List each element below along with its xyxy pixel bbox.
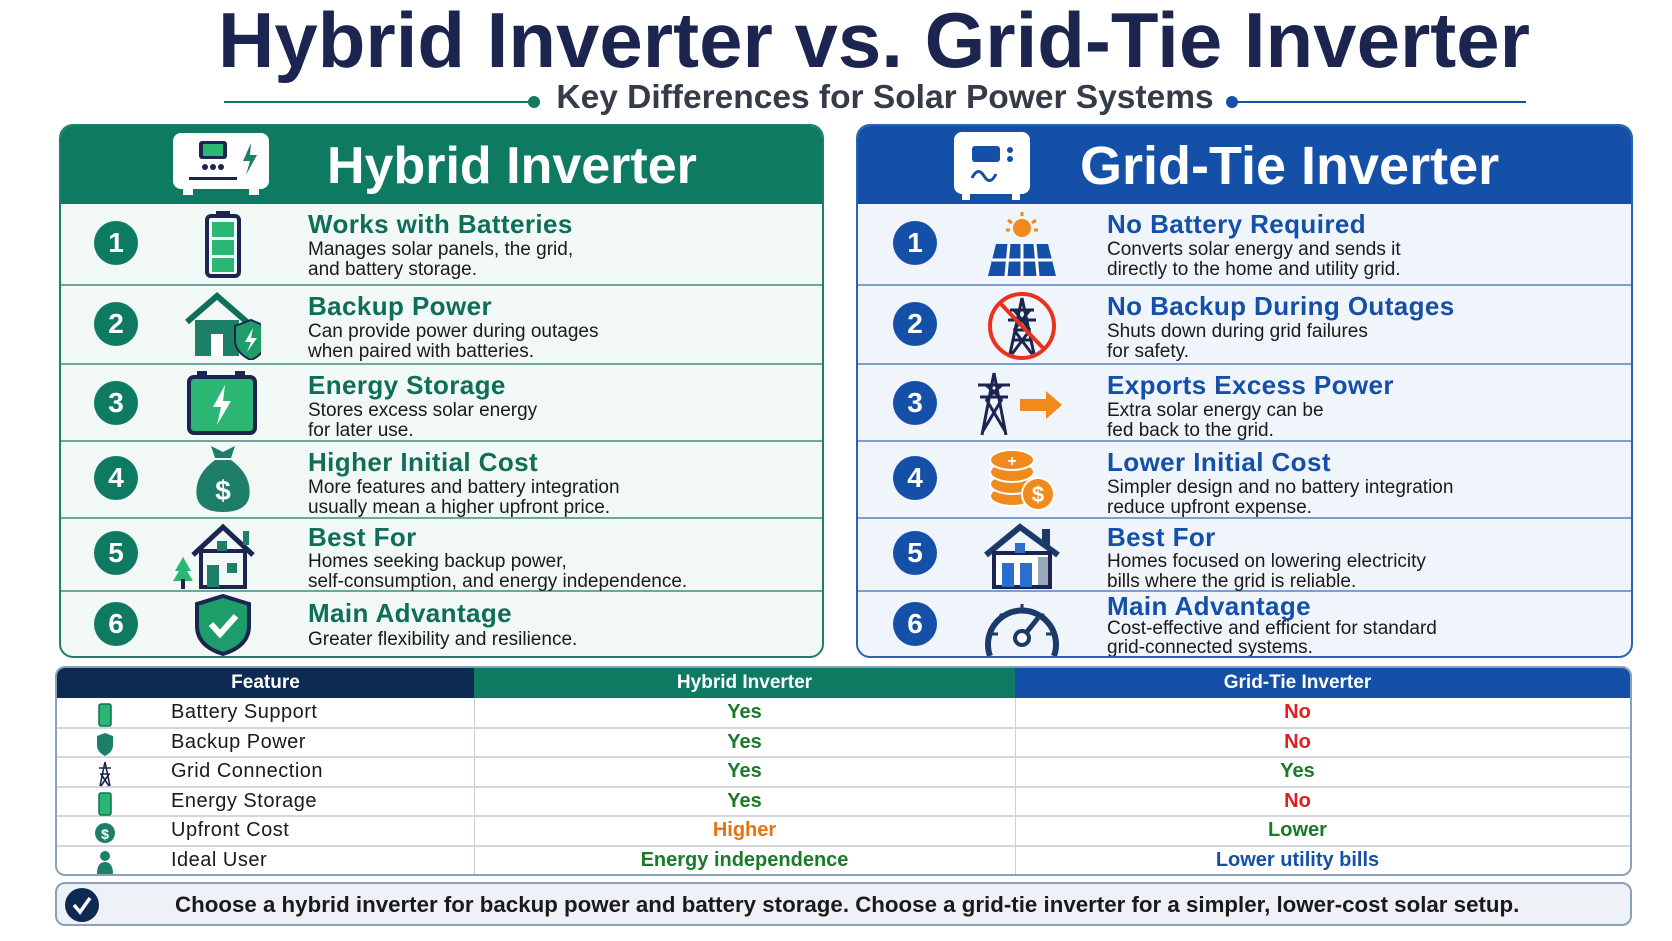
- row 3: 3: [907, 387, 923, 418]
- row 2: Shuts down during grid failures: [1107, 321, 1368, 342]
- row 2: Backup Power: [308, 291, 492, 321]
- row 1: [61, 204, 822, 286]
- row 3: Exports Excess Power: [1107, 370, 1394, 400]
- grid-tie values: Lower utility bills: [1216, 848, 1379, 870]
- table rows: [57, 698, 1630, 874]
- row 4: 4: [108, 462, 124, 493]
- row 3: fed back to the grid.: [1107, 420, 1274, 441]
- grid-tie values: No: [1284, 790, 1311, 812]
- hybrid values: Yes: [727, 730, 762, 752]
- row 4: reduce upfront expense.: [1107, 497, 1312, 518]
- row 3: 3: [108, 387, 124, 418]
- row 6: grid-connected systems.: [1107, 637, 1313, 658]
- icon: solar panel with sun: [988, 212, 1056, 276]
- row 1: [858, 204, 1631, 286]
- row 5: 5: [907, 537, 923, 568]
- row 2: for safety.: [1107, 341, 1189, 362]
- row 2: Can provide power during outages: [308, 321, 598, 342]
- feature labels: Backup Power: [171, 730, 306, 752]
- feature labels: Upfront Cost: [171, 819, 289, 841]
- bottom callout: [55, 882, 1632, 926]
- row 2: 2: [907, 308, 923, 339]
- row 1: and battery storage.: [308, 259, 477, 280]
- subtitle: Key Differences for Solar Power Systems: [556, 79, 1214, 116]
- row 4: More features and battery integration: [308, 477, 620, 498]
- row 5: self-consumption, and energy independence.: [308, 571, 687, 592]
- table icons: [95, 703, 115, 874]
- row 6: Main Advantage: [308, 598, 512, 628]
- row 2: [858, 286, 1631, 365]
- feature labels: Grid Connection: [171, 760, 323, 782]
- feature labels: Energy Storage: [171, 790, 317, 812]
- row 3: Energy Storage: [308, 370, 506, 400]
- row 6: [893, 591, 1437, 658]
- row 5: [858, 519, 1631, 592]
- hybrid values: [641, 701, 848, 870]
- row 6: Main Advantage: [1107, 591, 1311, 621]
- table icons: $: [101, 826, 109, 842]
- row 2: No Backup During Outages: [1107, 291, 1455, 321]
- row 1: 1: [108, 227, 124, 258]
- row 5: 5: [108, 537, 124, 568]
- row 1: No Battery Required: [1107, 209, 1366, 239]
- icon: tower with arrow: [978, 372, 1062, 436]
- icon: house with tree: [173, 524, 255, 589]
- panel: hybrid inverter: [59, 124, 824, 658]
- row 2: [61, 286, 822, 365]
- feature labels: Battery Support: [171, 701, 317, 723]
- header title: hybrid: Hybrid Inverter: [327, 137, 697, 195]
- bottom callout: Choose a hybrid inverter for backup power and battery storage. Choose a grid-tie inverter for a simpler, lower-cost solar setup.: [175, 892, 1519, 917]
- row 4: Lower Initial Cost: [1107, 447, 1331, 477]
- hybrid values: Yes: [727, 790, 762, 812]
- row 2: 2: [108, 308, 124, 339]
- grid-tie values: No: [1284, 701, 1311, 723]
- icon: energy storage battery: [187, 371, 257, 435]
- grid-tie values: No: [1284, 730, 1311, 752]
- table header: Hybrid Inverter: [677, 672, 812, 693]
- row 4: Simpler design and no battery integration: [1107, 477, 1453, 498]
- row 6: [94, 594, 577, 656]
- icon: shield check: [195, 594, 251, 656]
- grid-tie values: Yes: [1280, 760, 1315, 782]
- row 4: Higher Initial Cost: [308, 447, 538, 477]
- panel: grid-tie inverter: [856, 124, 1633, 658]
- row 4: [61, 442, 822, 519]
- icon: house: [984, 523, 1060, 589]
- table header: [57, 668, 1630, 698]
- icon: money bag: $: [215, 475, 231, 506]
- row 3: Stores excess solar energy: [308, 400, 537, 421]
- row 4: [858, 442, 1631, 519]
- row 4: 4: [907, 462, 923, 493]
- row 3: [858, 365, 1631, 442]
- grid-tie values: Lower: [1268, 819, 1327, 841]
- row 5: bills where the grid is reliable.: [1107, 571, 1356, 592]
- icon: no grid tower: [988, 292, 1056, 360]
- row 1: 1: [907, 227, 923, 258]
- row 3: [61, 365, 822, 442]
- panel header: hybrid: [61, 126, 822, 204]
- row 6: Cost-effective and efficient for standard: [1107, 618, 1437, 639]
- panel header: grid-tie: [858, 126, 1631, 204]
- icon: house shield: [185, 292, 261, 360]
- icon: battery: [205, 211, 241, 278]
- row 6: 6: [907, 608, 923, 639]
- row 1: Converts solar energy and sends it: [1107, 239, 1401, 260]
- row 5: Homes focused on lowering electricity: [1107, 551, 1426, 572]
- subtitle: [224, 79, 1526, 116]
- row 5: Homes seeking backup power,: [308, 551, 567, 572]
- hybrid values: Yes: [727, 701, 762, 723]
- table header: Feature: [231, 672, 300, 693]
- row 4: usually mean a higher upfront price.: [308, 497, 610, 518]
- feature labels: [171, 701, 323, 870]
- row 6: Greater flexibility and resilience.: [308, 629, 577, 650]
- icon: money bag: [196, 446, 250, 512]
- row 6: 6: [108, 608, 124, 639]
- hybrid values: Yes: [727, 760, 762, 782]
- row 3: for later use.: [308, 420, 414, 441]
- row 1: Works with Batteries: [308, 209, 573, 239]
- icon: hybrid inverter box: [173, 133, 269, 195]
- grid-tie values: [1216, 701, 1379, 870]
- hybrid values: Higher: [713, 819, 776, 841]
- row 1: Manages solar panels, the grid,: [308, 239, 573, 260]
- row 1: directly to the home and utility grid.: [1107, 259, 1401, 280]
- row 3: Extra solar energy can be: [1107, 400, 1324, 421]
- icon: coins: [989, 449, 1055, 511]
- table header: Grid-Tie Inverter: [1224, 672, 1371, 693]
- icon: grid-tie inverter box: [954, 132, 1030, 200]
- row 2: when paired with batteries.: [308, 341, 534, 362]
- hybrid values: Energy independence: [641, 848, 848, 870]
- comparison table: [55, 666, 1632, 876]
- row 5: Best For: [1107, 522, 1216, 552]
- feature labels: Ideal User: [171, 848, 267, 870]
- icon: coins: +: [1007, 453, 1017, 470]
- icon: coins: $: [1032, 482, 1044, 507]
- icon: gauge: [985, 604, 1059, 656]
- row 5: [61, 519, 822, 592]
- header title: grid-tie: Grid-Tie Inverter: [1080, 136, 1499, 196]
- row 5: Best For: [308, 522, 417, 552]
- icon: check circle: [65, 888, 99, 922]
